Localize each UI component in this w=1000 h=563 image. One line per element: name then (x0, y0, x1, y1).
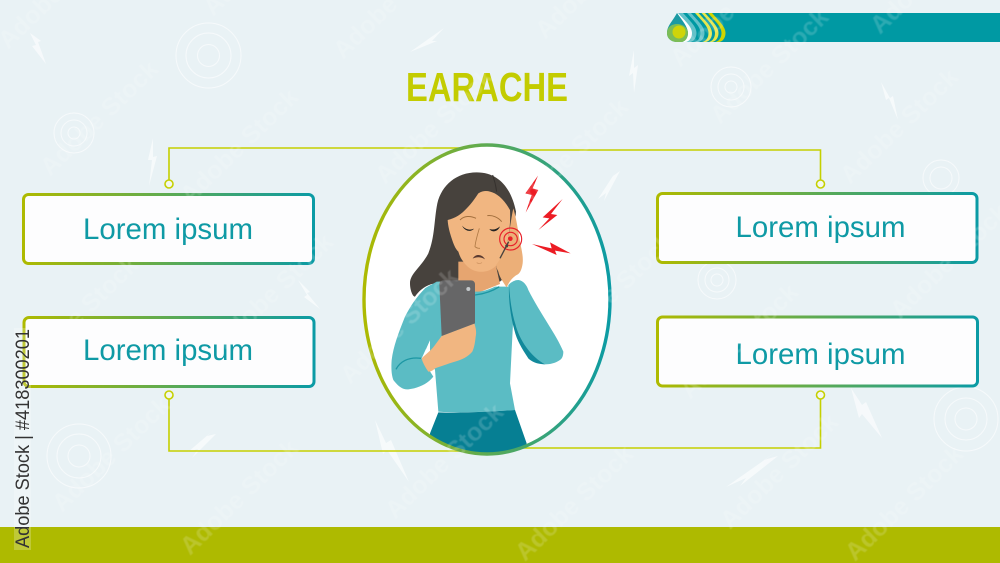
right arm (508, 280, 563, 364)
hair (410, 172, 516, 297)
watermark pattern: Adobe Stock (840, 440, 969, 563)
eyes and brows (462, 226, 500, 231)
holding hand (422, 323, 476, 372)
watermark pattern: Adobe Stock (175, 434, 304, 560)
stock id side label: Adobe Stock | #418300201 (12, 329, 34, 548)
watermark pattern: Adobe Stock (505, 93, 634, 219)
icon: drop logo (667, 13, 726, 42)
connector dots (165, 180, 824, 399)
title: EARACHE (406, 64, 568, 110)
watermark pattern: Adobe Stock (380, 398, 509, 524)
phone (439, 280, 475, 336)
skirt (430, 410, 527, 452)
watermark pattern: Adobe Stock (47, 391, 176, 517)
watermark pattern: Adobe Stock (705, 3, 834, 129)
watermark pattern: Adobe Stock (370, 63, 499, 189)
ellipse outline on top (364, 145, 610, 454)
panel: oval portrait (364, 145, 610, 460)
face (448, 191, 510, 272)
hand on ear (496, 208, 523, 287)
box: top left: Lorem ipsum (83, 213, 253, 246)
watermark pattern: Adobe Stock (835, 63, 964, 189)
watermark pattern: Adobe Stock (35, 55, 164, 181)
header bar with drop logo (667, 13, 1000, 42)
box: bottom right (658, 317, 978, 386)
bottom bar (0, 527, 1000, 563)
watermark pattern: Adobe Stock (550, 228, 679, 354)
right arm shading (509, 285, 545, 364)
lightning bolts (525, 176, 571, 255)
pain target (500, 228, 522, 250)
white gap by arm (426, 340, 430, 353)
sweater body (425, 282, 515, 412)
watermark pattern: Adobe Stock (15, 251, 144, 377)
box: top right: Lorem ipsum (736, 211, 906, 244)
watermark pattern: Adobe (665, 0, 740, 72)
person illustration (391, 172, 571, 460)
nose and mouth (475, 228, 480, 248)
watermark pattern: Adobe Stock (175, 83, 304, 209)
watermark pattern: Adobe Stock (510, 440, 639, 563)
box: top left (24, 194, 314, 264)
watermark pattern: Adobe Stock (715, 408, 844, 534)
box: top right (658, 194, 977, 262)
box: bottom right: Lorem ipsum (736, 338, 906, 371)
neck (458, 262, 500, 294)
background decoration: rings and bolts (30, 23, 998, 488)
watermark pattern: Adobe Stock (335, 263, 464, 389)
connector lines (169, 148, 820, 451)
left arm (391, 284, 434, 390)
box: bottom left (24, 318, 314, 386)
box: bottom left: Lorem ipsum (83, 334, 253, 367)
watermark pattern: Adobe Stock (675, 278, 804, 404)
watermark pattern: Adobe Stock (210, 228, 339, 354)
